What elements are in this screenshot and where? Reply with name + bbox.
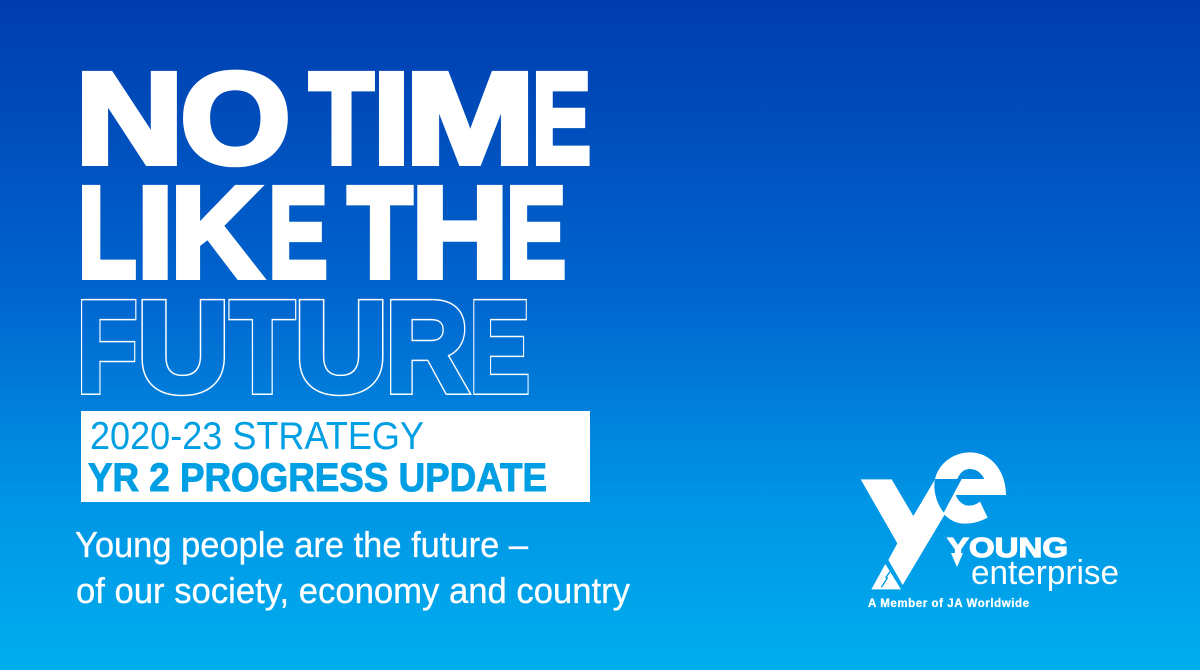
tagline line 2: of our society, economy and country [76,570,630,611]
logo mark: letter e [935,452,1006,524]
title line: FUTURE outlined: U [137,276,229,420]
title line: NO TIME: O [180,47,290,191]
title line: FUTURE outlined [77,276,530,420]
banner background [81,411,590,502]
title line: LIKE THE [78,161,566,305]
title line: FUTURE outlined: U [294,276,388,420]
title line: LIKE THE: E [268,161,328,305]
logo mark: JA triangle [871,564,901,589]
logo wordmark: YOUNG with slanted Y tail: YOUNG [947,532,1068,563]
title line: LIKE THE: K [170,161,262,305]
tagline [75,524,630,611]
title line: NO TIME: E [532,47,591,191]
title line: FUTURE outlined: R [385,276,469,420]
title line: LIKE THE: E [506,161,566,305]
title line: NO TIME: I [373,47,410,191]
title line: FUTURE outlined: R [385,276,469,420]
logo strapline: A Member of JA Worldwide [868,598,1029,610]
title line: FUTURE outlined: T [230,276,295,420]
title line: FUTURE outlined: E [470,276,530,420]
Young Enterprise logo [861,452,1119,610]
logo mark: letter y [861,479,945,585]
banner line: 2020-23 strategy: 2020-23 STRATEGY [90,415,424,458]
title line: FUTURE outlined: F [77,276,137,420]
banner line: year 2 progress update: YR 2 PROGRESS UPDATE [88,456,547,500]
title line: FUTURE outlined: F [77,276,137,420]
title line: LIKE THE: T [348,161,412,305]
title line: FUTURE outlined: U [137,276,229,420]
title line: FUTURE outlined: U [294,276,388,420]
logo wordmark: enterprise: enterprise [971,554,1119,592]
title line: LIKE THE: L [78,161,137,305]
title line: FUTURE outlined: T [230,276,295,420]
title line: NO TIME: T [309,47,374,191]
title line: FUTURE outlined: E [470,276,530,420]
title [76,47,591,420]
title line: NO TIME [76,47,591,191]
tagline line 1: Young people are the future – [75,524,528,565]
title line: LIKE THE: H [411,161,508,305]
title line: NO TIME: M [405,47,535,191]
title line: LIKE THE: I [137,161,173,305]
title line: NO TIME: N [76,47,184,191]
strategy banner [81,411,590,502]
